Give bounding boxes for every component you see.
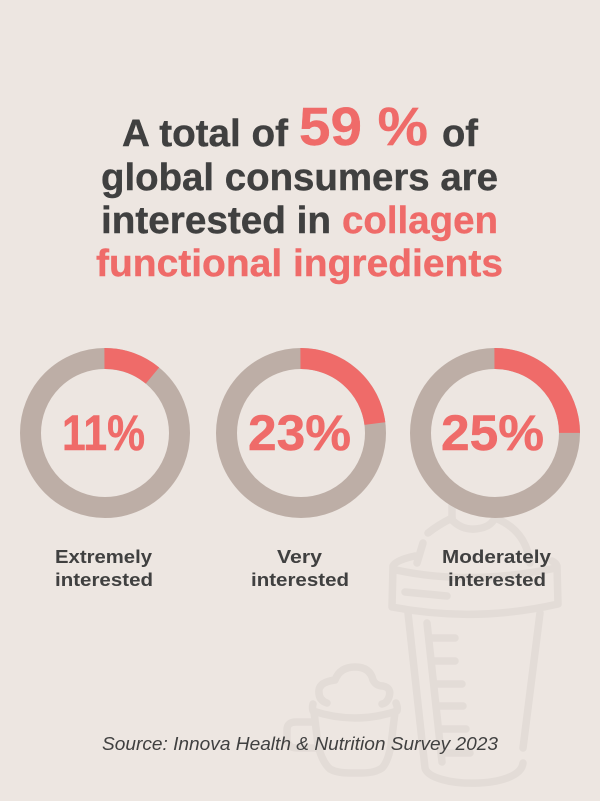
icon: protein shaker bottle xyxy=(392,503,558,783)
title xyxy=(96,97,503,285)
title: collagen xyxy=(342,200,498,242)
donut chart: 23% very interested xyxy=(226,358,376,508)
label: extremely interested: interested xyxy=(55,569,153,590)
title: A total of xyxy=(122,113,288,155)
label: moderately interested xyxy=(442,546,552,590)
source note: Source: Innova Health & Nutrition Survey 2023 xyxy=(102,734,498,754)
title: 59 % xyxy=(299,97,428,157)
title: interested in xyxy=(101,200,331,242)
title: functional ingredients xyxy=(96,243,503,285)
label: very interested xyxy=(251,546,349,590)
donut chart: 11% extremely interested xyxy=(30,358,180,508)
label: moderately interested: Moderately xyxy=(442,546,552,567)
label: moderately interested: interested xyxy=(448,569,546,590)
donut chart: 23% very interested: 23% xyxy=(248,405,351,461)
label: very interested: interested xyxy=(251,569,349,590)
label: very interested: Very xyxy=(277,546,323,567)
label: extremely interested xyxy=(55,546,153,590)
donut chart: 25% moderately interested xyxy=(420,358,570,508)
title: of xyxy=(442,113,478,155)
title: global consumers are xyxy=(101,157,498,199)
donut chart: 11% extremely interested: 11% xyxy=(62,405,145,461)
icon: powder scoop cup xyxy=(287,667,397,773)
donut chart: 25% moderately interested: 25% xyxy=(441,405,544,461)
label: extremely interested: Extremely xyxy=(55,546,153,567)
